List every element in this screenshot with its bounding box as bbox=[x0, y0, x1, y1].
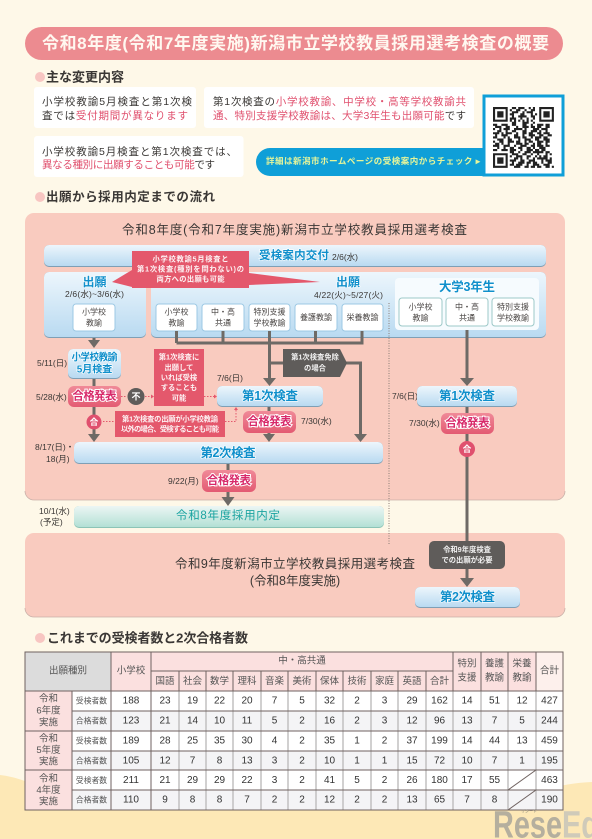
option: nutrition teacher bbox=[342, 304, 383, 331]
row: Reiwa 6 applicants: 427 bbox=[541, 696, 558, 706]
row: Reiwa 4 passers: 12 bbox=[324, 794, 335, 806]
table header: 美術 bbox=[292, 675, 312, 687]
row: Reiwa 6 passers: 5 bbox=[519, 716, 525, 726]
row: Reiwa 6 applicants: 32 bbox=[324, 696, 335, 706]
website link banner bbox=[256, 148, 490, 176]
row: Reiwa 5 applicants: 44 bbox=[489, 736, 500, 746]
note: may take first exam: 出願して bbox=[165, 363, 193, 372]
note: may take first exam bbox=[154, 349, 204, 406]
row: Reiwa 4 applicants: 17 bbox=[461, 775, 473, 786]
row: Reiwa 5 applicants: 199 bbox=[431, 736, 448, 746]
change note: different categories bbox=[34, 136, 244, 177]
row: Reiwa 6 applicants: 29 bbox=[406, 696, 418, 706]
row labels: 合格者数 bbox=[76, 756, 107, 766]
note: may take first exam: いれば受検 bbox=[161, 373, 198, 382]
row: Reiwa 5 passers: 195 bbox=[541, 756, 558, 766]
row: Reiwa 5 applicants: 13 bbox=[516, 736, 528, 746]
date: offer bbox=[39, 506, 70, 527]
table header: 社会 bbox=[183, 675, 202, 687]
callout: both exams possible bbox=[112, 251, 320, 288]
option: junior/senior high bbox=[446, 298, 488, 326]
row: Reiwa 5 applicants: 14 bbox=[461, 736, 473, 746]
row: Reiwa 6 applicants: 3 bbox=[382, 696, 388, 706]
table header: 家庭 bbox=[375, 675, 394, 687]
application box: first exam: 4/22(火)~5/27(火) bbox=[314, 290, 383, 300]
row: Reiwa 5 passers: 10 bbox=[324, 756, 335, 766]
change note: third-year students bbox=[204, 87, 474, 128]
arrow: exemption route bbox=[270, 363, 367, 442]
table header: 支援 bbox=[457, 672, 477, 684]
option: elementary: 教諭 bbox=[412, 312, 428, 322]
badge: fail: 不 bbox=[131, 392, 141, 402]
badge: third-year pass: 合 bbox=[463, 444, 472, 454]
badge: pass: 合 bbox=[90, 417, 99, 427]
row: Reiwa 6 applicants: 162 bbox=[431, 696, 448, 706]
row: Reiwa 5 passers: 7 bbox=[492, 756, 498, 766]
application box: first exam: 出願 bbox=[336, 275, 360, 289]
website link banner: 詳細は新潟市ホームページの受検案内からチェック ▸ bbox=[266, 156, 481, 166]
row: Reiwa 6 passers: 3 bbox=[382, 716, 388, 726]
row: Reiwa 4 applicants: 55 bbox=[489, 775, 500, 786]
option: junior/senior high: 中・高 bbox=[211, 306, 235, 316]
row: Reiwa 6 passers: 13 bbox=[461, 716, 473, 726]
row: Reiwa 4 applicants: 2 bbox=[382, 775, 388, 786]
row: Reiwa 6 passers: 2 bbox=[299, 716, 305, 726]
note: other categories may also take: 第1次検査の出願が小学校教諭 bbox=[122, 414, 219, 424]
row: Reiwa 6 applicants bbox=[123, 696, 558, 706]
row: Reiwa 4 applicants: 3 bbox=[272, 775, 278, 786]
note: must apply in 2027: 令和9年度検査 bbox=[443, 545, 492, 554]
table header: 養護 bbox=[485, 658, 504, 670]
table header: 合計 bbox=[430, 675, 449, 687]
row: Reiwa 4 passers: 7 bbox=[244, 794, 250, 806]
heading: applicants table: これまでの受検者数と2次合格者数 bbox=[47, 630, 248, 646]
row: Reiwa 4 applicants: 2 bbox=[299, 775, 305, 786]
QR code bbox=[484, 96, 563, 175]
bar: exam guide distribution: 受検案内交付 bbox=[259, 248, 330, 262]
option: elementary: 教諭 bbox=[168, 318, 184, 328]
row: Reiwa 6 applicants: 23 bbox=[159, 696, 171, 706]
box: third-year first exam bbox=[417, 386, 517, 407]
table header: 理科 bbox=[237, 675, 257, 687]
row: Reiwa 5 applicants: 35 bbox=[214, 736, 225, 746]
row: Reiwa 5 applicants: 25 bbox=[187, 736, 198, 746]
row: Reiwa 4 passers: 2 bbox=[354, 794, 360, 806]
row: Reiwa 4 passers: 190 bbox=[541, 794, 558, 806]
callout: both exams possible: 第1次検査(種別を問わない)の bbox=[137, 264, 244, 274]
option: nursing teacher bbox=[295, 304, 337, 331]
row: Reiwa 5 passers bbox=[123, 756, 558, 766]
application box: May exam bbox=[44, 272, 146, 338]
note: other categories may also take bbox=[115, 411, 225, 437]
arrows: first exam merge bbox=[176, 331, 364, 386]
heading: flow: 出願から採用内定までの流れ bbox=[46, 189, 215, 204]
panel text: (令和8年度実施) bbox=[250, 573, 340, 588]
note: may take first exam: 第1次検査に bbox=[159, 352, 199, 362]
row: Reiwa 4 applicants: 41 bbox=[324, 775, 335, 786]
date: May exam: 5/11(日) bbox=[37, 358, 67, 368]
arrows: second exam to offer bbox=[222, 464, 234, 506]
row: Reiwa 5 applicants: 4 bbox=[272, 736, 278, 746]
note: must apply in 2027 bbox=[429, 541, 505, 569]
table header bbox=[49, 654, 559, 687]
row: Reiwa 4 applicants: 211 bbox=[123, 775, 139, 786]
row: Reiwa 5 passers: 7 bbox=[190, 756, 196, 766]
box: second exam bbox=[74, 442, 383, 464]
table header: 技術 bbox=[347, 675, 367, 687]
table header: 保体 bbox=[320, 675, 339, 687]
label: first-exam exemption: 第1次検査免除 bbox=[291, 352, 340, 362]
option: junior/senior high bbox=[202, 304, 244, 331]
table header: 国語 bbox=[155, 676, 175, 687]
row: Reiwa 5 applicants: 35 bbox=[324, 736, 335, 746]
row labels: 実施 bbox=[39, 796, 58, 808]
row: Reiwa 6 passers: 244 bbox=[541, 716, 558, 726]
note: may take first exam: することも bbox=[161, 383, 197, 392]
note: may take first exam: 可能 bbox=[172, 394, 187, 402]
title banner bbox=[25, 27, 563, 60]
row: Reiwa 5 applicants: 459 bbox=[541, 736, 558, 746]
option: special needs: 特別支援 bbox=[497, 302, 529, 312]
bar: exam guide distribution bbox=[44, 245, 546, 267]
row: Reiwa 5 passers: 72 bbox=[434, 756, 445, 766]
row labels: 令和 bbox=[39, 692, 58, 704]
row labels: 令和 bbox=[39, 772, 58, 784]
table header: 数学 bbox=[210, 675, 229, 687]
box: second exam: 第2次検査 bbox=[200, 445, 256, 460]
row: Reiwa 5 passers: 1 bbox=[354, 756, 360, 766]
panel: 2026 examination flow bbox=[25, 213, 565, 500]
row: Reiwa 6 passers bbox=[123, 716, 558, 726]
row labels: 6年度 bbox=[36, 704, 61, 716]
table header: 中・高共通 bbox=[278, 654, 326, 666]
box: first exam: 第1次検査 bbox=[242, 388, 298, 403]
result: third-year first exam: 合格発表 bbox=[446, 416, 490, 430]
box: May exam: 5月検査 bbox=[77, 362, 112, 376]
option: elementary: 教諭 bbox=[86, 318, 102, 328]
option: elementary: 小学校 bbox=[164, 306, 188, 316]
row: Reiwa 5 applicants: 28 bbox=[159, 736, 171, 746]
option: nursing teacher: 養護教諭 bbox=[300, 312, 332, 322]
row: Reiwa 6 applicants: 188 bbox=[123, 696, 140, 706]
badge: fail bbox=[128, 388, 144, 405]
table header: 特別 bbox=[457, 658, 477, 670]
date: offer: 10/1(水) bbox=[39, 506, 70, 516]
row labels: 実施 bbox=[39, 756, 58, 768]
change note: third-year students: 第1次検査の小学校教諭、中学校・高等学校教諭共 bbox=[213, 95, 466, 108]
row: Reiwa 6 passers: 5 bbox=[272, 716, 278, 726]
note: other categories may also take: 以外の場合、受検することも可能 bbox=[121, 424, 220, 434]
arrows: first exam to second exam bbox=[263, 407, 275, 442]
application box: first exam bbox=[151, 272, 546, 338]
box: 2027 second exam: 第2次検査 bbox=[440, 589, 495, 604]
row: Reiwa 4 passers: 2 bbox=[272, 794, 278, 806]
option: special needs: 学校教諭 bbox=[497, 312, 529, 322]
result: first exam bbox=[243, 411, 296, 433]
result: third-year first exam bbox=[441, 413, 494, 434]
row: Reiwa 6 applicants: 5 bbox=[299, 696, 305, 706]
row: Reiwa 5 applicants: 30 bbox=[241, 736, 253, 746]
result: second exam bbox=[202, 470, 256, 492]
result: first exam: 合格発表 bbox=[248, 414, 292, 428]
date: second exam result: 9/22(月) bbox=[168, 476, 199, 486]
box: first exam bbox=[217, 386, 323, 407]
table header: 栄養 bbox=[512, 658, 532, 670]
row labels: 受検者数 bbox=[76, 736, 107, 746]
change note: different categories: 異なる種別に出願することも可能です bbox=[42, 158, 215, 171]
table backgrounds bbox=[25, 652, 563, 810]
change note: third-year students: 通、特別支援学校教諭は、大学3年生も出願可能です bbox=[213, 109, 466, 122]
row: Reiwa 4 passers: 2 bbox=[382, 794, 388, 806]
row: Reiwa 5 applicants: 2 bbox=[382, 736, 388, 746]
option: elementary: 小学校 bbox=[408, 302, 432, 312]
row: Reiwa 4 passers: 9 bbox=[162, 794, 168, 806]
box: May exam bbox=[68, 349, 121, 379]
option: elementary bbox=[73, 304, 115, 331]
option: elementary bbox=[156, 304, 197, 331]
row: Reiwa 5 applicants: 1 bbox=[354, 736, 360, 746]
date: third-year result: 7/30(水) bbox=[409, 418, 440, 428]
dotted connectors bbox=[103, 394, 238, 422]
change note: application period bbox=[34, 87, 196, 128]
row: Reiwa 4 applicants: 5 bbox=[354, 775, 360, 786]
row: Reiwa 4 applicants: 21 bbox=[159, 775, 171, 786]
table grid bbox=[179, 691, 536, 810]
badge: third-year pass bbox=[459, 441, 475, 457]
row: Reiwa 4 applicants: 463 bbox=[541, 775, 558, 786]
row: Reiwa 6 passers: 123 bbox=[123, 716, 140, 726]
box: third-year first exam: 第1次検査 bbox=[439, 388, 495, 403]
callout: both exams possible: 両方への出願も可能 bbox=[156, 274, 225, 284]
date: third-year first exam: 7/6(日) bbox=[392, 391, 418, 401]
row: Reiwa 5 applicants bbox=[123, 736, 558, 746]
background wave bbox=[0, 775, 592, 839]
table header: 合計 bbox=[540, 664, 559, 676]
row: Reiwa 6 passers: 12 bbox=[406, 716, 418, 726]
row: Reiwa 6 applicants: 2 bbox=[354, 696, 360, 706]
row: Reiwa 4 applicants: 29 bbox=[187, 775, 198, 786]
row: Reiwa 5 passers: 105 bbox=[123, 756, 140, 766]
row: Reiwa 5 passers: 2 bbox=[299, 756, 305, 766]
option: junior/senior high: 共通 bbox=[215, 318, 231, 328]
row: Reiwa 6 applicants: 14 bbox=[461, 696, 473, 706]
row: Reiwa 5 passers: 13 bbox=[241, 756, 253, 766]
row labels: 5年度 bbox=[36, 744, 61, 756]
row: Reiwa 4 passers bbox=[123, 794, 558, 806]
row: Reiwa 4 applicants: 180 bbox=[431, 775, 448, 786]
option: special needs bbox=[249, 304, 290, 331]
callout: both exams possible: 小学校教諭5月検査と bbox=[152, 254, 228, 264]
table: applicants and passers bbox=[25, 652, 563, 810]
row: Reiwa 6 passers: 10 bbox=[214, 716, 225, 726]
row: Reiwa 6 passers: 2 bbox=[354, 716, 360, 726]
date: offer: (予定) bbox=[40, 517, 63, 527]
row: Reiwa 5 passers: 12 bbox=[159, 756, 171, 766]
badge: pass bbox=[86, 414, 102, 430]
row: Reiwa 6 passers: 14 bbox=[187, 716, 198, 726]
row: Reiwa 6 passers: 11 bbox=[242, 716, 253, 726]
row: Reiwa 6 applicants: 22 bbox=[214, 696, 225, 706]
row labels: 受検者数 bbox=[76, 775, 107, 785]
application box: May exam: 2/6(水)~3/6(水) bbox=[65, 289, 124, 299]
row: Reiwa 5 passers: 15 bbox=[406, 756, 418, 766]
row: Reiwa 6 applicants: 19 bbox=[187, 696, 198, 706]
row: Reiwa 6 applicants: 20 bbox=[241, 696, 253, 706]
row: Reiwa 4 passers: 8 bbox=[190, 794, 196, 806]
row: Reiwa 6 passers: 96 bbox=[434, 716, 445, 726]
title banner: 令和8年度(令和7年度実施)新潟市立学校教員採用選考検査の概要 bbox=[42, 33, 549, 53]
date: second exam: 8/17(日)・ bbox=[35, 442, 74, 452]
table header: 出願種別 bbox=[49, 664, 87, 676]
row: Reiwa 5 applicants: 37 bbox=[406, 736, 418, 746]
row: Reiwa 6 applicants: 51 bbox=[489, 696, 500, 706]
panel text bbox=[175, 556, 415, 588]
row: Reiwa 6 passers: 21 bbox=[159, 716, 171, 726]
bar: offer bbox=[74, 506, 384, 528]
row labels: 令和 bbox=[39, 732, 58, 744]
option: special needs: 学校教諭 bbox=[254, 318, 286, 328]
panel: 2027 examination bbox=[25, 533, 565, 617]
row: Reiwa 6 applicants: 7 bbox=[272, 696, 278, 706]
table header: 教諭 bbox=[512, 672, 532, 684]
option: elementary: 小学校 bbox=[82, 306, 106, 316]
date: second exam bbox=[35, 442, 74, 464]
row labels: 合格者数 bbox=[76, 716, 107, 726]
table header: 音楽 bbox=[265, 675, 284, 687]
row: Reiwa 4 passers: 2 bbox=[299, 794, 305, 806]
divider between tracks bbox=[388, 303, 390, 544]
change note: application period: 小学校教諭5月検査と第1次検 bbox=[42, 95, 192, 108]
row: Reiwa 5 passers: 3 bbox=[272, 756, 278, 766]
row labels: 4年度 bbox=[36, 784, 61, 796]
row: Reiwa 5 passers: 1 bbox=[519, 756, 525, 766]
watermark logo: リシード bbox=[521, 808, 537, 814]
row: Reiwa 5 applicants: 2 bbox=[299, 736, 305, 746]
row labels: 合格者数 bbox=[76, 794, 107, 804]
row: Reiwa 5 passers: 10 bbox=[461, 756, 473, 766]
change note: different categories: 小学校教諭5月検査と第1次検査では、 bbox=[42, 145, 237, 158]
label: first-exam exemption bbox=[283, 349, 347, 377]
table header: 教諭 bbox=[485, 672, 504, 684]
row: Reiwa 4 passers: 8 bbox=[492, 794, 498, 806]
label: first-exam exemption: の場合 bbox=[304, 364, 327, 372]
third-year students box bbox=[395, 278, 539, 330]
arrows: left track bbox=[88, 338, 100, 442]
panel text: 令和9年度新潟市立学校教員採用選考検査 bbox=[175, 556, 415, 571]
arrows: third-year track bbox=[460, 330, 474, 587]
table header: 英語 bbox=[402, 675, 422, 687]
date: first exam: 7/6(日) bbox=[217, 373, 243, 383]
result: second exam: 合格発表 bbox=[207, 473, 252, 487]
option: nutrition teacher: 栄養教諭 bbox=[346, 312, 378, 322]
row: Reiwa 4 passers: 13 bbox=[406, 794, 418, 806]
row: Reiwa 5 applicants: 189 bbox=[123, 736, 140, 746]
bar: offer: 令和8年度採用内定 bbox=[176, 508, 280, 522]
row: Reiwa 6 passers: 16 bbox=[324, 716, 335, 726]
heading: main changes: 主な変更内容 bbox=[46, 70, 124, 84]
box: May exam: 小学校教諭 bbox=[72, 350, 118, 364]
row labels: 受検者数 bbox=[76, 696, 107, 706]
row: Reiwa 4 applicants: 26 bbox=[406, 775, 418, 786]
row: Reiwa 4 passers: 8 bbox=[217, 794, 223, 806]
row: Reiwa 5 passers: 8 bbox=[217, 756, 223, 766]
option: junior/senior high: 共通 bbox=[459, 312, 475, 322]
row: Reiwa 4 passers: 7 bbox=[464, 794, 470, 806]
option: elementary bbox=[399, 298, 442, 326]
option: junior/senior high: 中・高 bbox=[455, 302, 479, 312]
row: Reiwa 4 applicants bbox=[123, 775, 558, 786]
result: May exam bbox=[68, 386, 121, 407]
table header: 小学校 bbox=[117, 664, 146, 676]
change note: application period: 査では受付期間が異なります bbox=[42, 109, 188, 122]
row: Reiwa 5 passers: 1 bbox=[382, 756, 388, 766]
result: May exam: 合格発表 bbox=[72, 388, 117, 402]
date: May result: 5/28(水) bbox=[36, 392, 67, 402]
row: Reiwa 4 passers: 65 bbox=[434, 794, 445, 806]
row labels bbox=[36, 692, 107, 808]
row: Reiwa 6 applicants: 12 bbox=[516, 696, 528, 706]
option: special needs: 特別支援 bbox=[254, 306, 286, 316]
row: Reiwa 4 applicants: 22 bbox=[241, 775, 253, 786]
row: Reiwa 4 passers: 110 bbox=[123, 794, 139, 806]
date: first exam result: 7/30(水) bbox=[301, 416, 332, 426]
application box: May exam: 出願 bbox=[82, 275, 107, 289]
row labels: 実施 bbox=[39, 716, 58, 728]
date: second exam: 18(月) bbox=[46, 454, 70, 464]
bar: exam guide distribution: 2/6(水) bbox=[332, 252, 358, 262]
row: Reiwa 4 applicants: 29 bbox=[214, 775, 225, 786]
panel title: 令和8年度(令和7年度実施)新潟市立学校教員採用選考検査 bbox=[122, 222, 467, 237]
note: must apply in 2027: での出願が必要 bbox=[441, 556, 493, 564]
option: special needs bbox=[492, 298, 534, 326]
third-year students box: 大学3年生 bbox=[439, 279, 495, 294]
row: Reiwa 6 passers: 7 bbox=[492, 716, 498, 726]
box: 2027 second exam bbox=[415, 587, 520, 608]
